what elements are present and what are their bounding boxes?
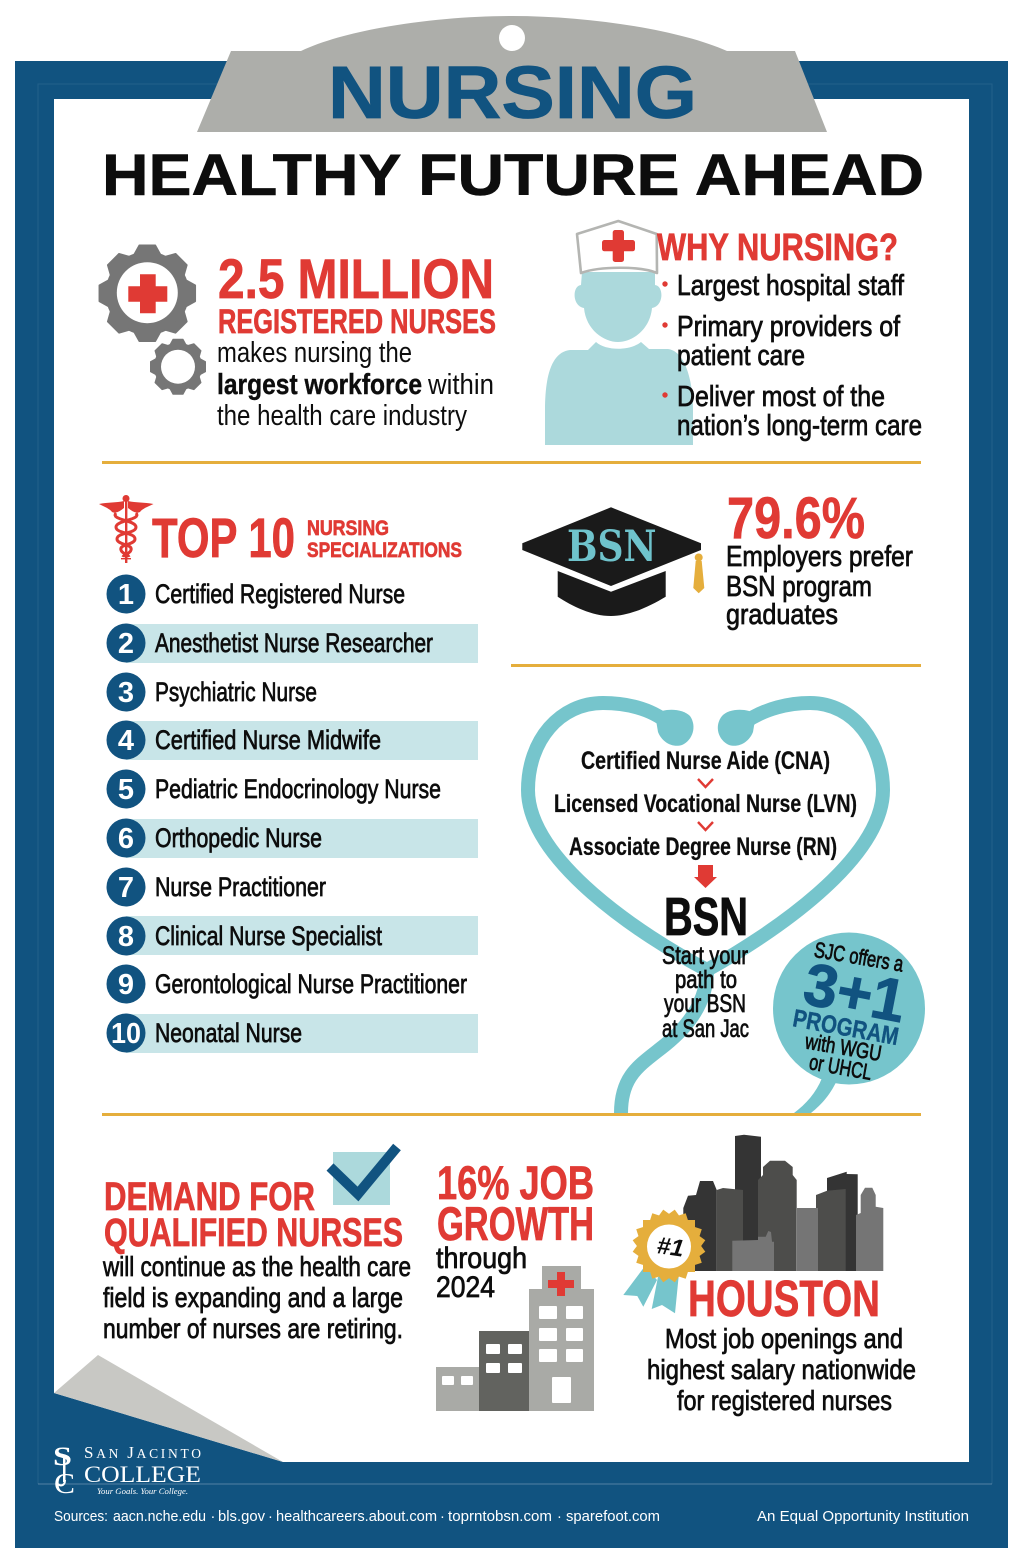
list: specializations: Certified Registered Nurse [155, 579, 405, 609]
equal opportunity note: An Equal Opportunity Institution [757, 1509, 969, 1525]
list: specializations: 3 [118, 677, 134, 709]
badge: 3+1 program [773, 932, 925, 1113]
list: specializations: 1 [118, 579, 134, 611]
sources: bls.gov [218, 1509, 266, 1525]
career path steps: path to [675, 966, 737, 994]
sources: · [557, 1509, 562, 1525]
houston text: HOUSTON [688, 1270, 880, 1327]
career path steps: your BSN [664, 990, 746, 1018]
list: specializations: Gerontological Nurse Practitioner [155, 969, 467, 999]
houston text: Most job openings and [665, 1323, 903, 1354]
stat: 2.5 million registered nurses: makes nursing the [217, 337, 412, 369]
demand for qualified nurses: will continue as the health care [102, 1251, 411, 1282]
icon: nurse [545, 221, 693, 445]
demand for qualified nurses: DEMAND FOR [104, 1175, 315, 1219]
sources: toprntobsn.com [448, 1509, 552, 1525]
list: specializations: 9 [118, 969, 134, 1001]
badge: 3+1 program: with WGU [803, 1028, 884, 1066]
icon: number one ribbon [623, 1210, 705, 1313]
list: specializations [106, 574, 478, 1053]
career path steps: BSN [664, 887, 748, 947]
list: specializations: 8 [118, 921, 134, 953]
list: specializations: 4 [118, 725, 134, 757]
stat: 16 percent job growth: 16% JOB [437, 1156, 594, 1209]
why nursing list: Primary providers of [677, 311, 901, 343]
logo: san jacinto college: Your Goals. Your College. [97, 1486, 188, 1496]
houston text: highest salary nationwide [647, 1354, 916, 1385]
why nursing list: Deliver most of the [677, 381, 885, 413]
stat: 2.5 million registered nurses: REGISTERED NURSES [218, 303, 496, 341]
stat: 16 percent job growth: 2024 [436, 1271, 495, 1304]
list: specializations: 10 [111, 1018, 141, 1050]
icon: houston skyline [683, 1135, 883, 1271]
badge: 3+1 program: or UHCL [807, 1049, 874, 1085]
why nursing heading: WHY NURSING? [657, 227, 898, 269]
sources: sparefoot.com [566, 1509, 660, 1525]
demand for qualified nurses: number of nurses are retiring. [103, 1313, 403, 1344]
icon: graduation cap: BSN [567, 522, 656, 572]
logo: san jacinto college: COLLEGE [84, 1462, 201, 1487]
heading: top 10 nursing specializations: TOP 10 [152, 506, 295, 569]
why nursing list [662, 270, 922, 442]
stat: 79.6 percent: graduates [726, 599, 838, 631]
sources: Sources: [54, 1509, 108, 1525]
icon: graduation cap [522, 507, 704, 616]
sources: · [210, 1509, 215, 1525]
page curl [54, 1355, 283, 1462]
icon: number one ribbon: #1 [655, 1232, 686, 1263]
sources: aacn.nche.edu [113, 1509, 206, 1525]
stat: 2.5 million registered nurses: the health care industry [217, 400, 467, 432]
list: specializations: 5 [118, 774, 134, 806]
stat: 79.6 percent: BSN program [726, 571, 872, 603]
icon: checkmark [330, 1147, 397, 1205]
badge: 3+1 program: SJC offers a [812, 937, 906, 977]
subtitle: HEALTHY FUTURE AHEAD [102, 143, 924, 208]
list: specializations: Clinical Nurse Specialist [155, 921, 382, 951]
heading: top 10 nursing specializations: SPECIALIZATIONS [307, 539, 462, 562]
list: specializations: Psychiatric Nurse [155, 677, 317, 707]
heading: top 10 nursing specializations [152, 506, 462, 569]
why nursing list: nation’s long-term care [677, 410, 922, 442]
icon: caduceus [99, 495, 154, 563]
stat: 2.5 million registered nurses: largest workforce [217, 369, 422, 401]
logo: san jacinto college [53, 1442, 201, 1500]
stat: 79.6 percent: Employers prefer [726, 541, 913, 573]
list: specializations: Pediatric Endocrinology Nurse [155, 774, 441, 804]
houston text: for registered nurses [677, 1385, 892, 1416]
logo: san jacinto college: SAN JACINTO [84, 1443, 201, 1462]
why nursing list: patient care [677, 340, 805, 372]
stat: 2.5 million registered nurses [217, 247, 496, 432]
list: specializations: Nurse Practitioner [155, 872, 326, 902]
career path steps: at San Jac [662, 1015, 749, 1043]
stat: 2.5 million registered nurses: 2.5 MILLION [218, 247, 494, 310]
list: specializations: Orthopedic Nurse [155, 823, 322, 853]
icon: gears [99, 245, 206, 394]
clipboard clip [197, 16, 827, 132]
demand for qualified nurses: QUALIFIED NURSES [104, 1211, 403, 1255]
icon: hospital [436, 1266, 594, 1411]
stat: 16 percent job growth: through [436, 1242, 527, 1275]
sources: healthcareers.about.com [276, 1509, 437, 1525]
sources: · [440, 1509, 445, 1525]
list: specializations: Anesthetist Nurse Researcher [155, 628, 433, 658]
icon: stethoscope heart [528, 703, 883, 1113]
list: specializations: 2 [118, 628, 134, 660]
career path steps: Certified Nurse Aide (CNA) [581, 747, 830, 775]
logo: san jacinto college: S [53, 1442, 72, 1471]
demand for qualified nurses: field is expanding and a large [103, 1282, 403, 1313]
list: specializations: Certified Nurse Midwife [155, 725, 381, 755]
list: specializations: 6 [118, 823, 134, 855]
sources [54, 1509, 660, 1525]
career path steps: Licensed Vocational Nurse (LVN) [554, 790, 857, 818]
houston text [647, 1270, 916, 1416]
logo: san jacinto college: C [54, 1469, 75, 1500]
career path steps: Associate Degree Nurse (RN) [569, 833, 837, 861]
demand for qualified nurses [102, 1175, 411, 1344]
stat: 79.6 percent: 79.6% [727, 486, 865, 551]
stat: 79.6 percent [726, 486, 913, 631]
badge: 3+1 program: PROGRAM [791, 1004, 901, 1051]
list: specializations: Neonatal Nurse [155, 1018, 302, 1048]
why nursing list: Largest hospital staff [677, 270, 905, 302]
title: nursing: NURSING [328, 51, 697, 134]
stat: 16 percent job growth: GROWTH [437, 1197, 594, 1250]
badge: 3+1 program: 3+1 [799, 950, 911, 1035]
career path steps: Start your [662, 942, 748, 970]
sources: · [268, 1509, 273, 1525]
stat: 2.5 million registered nurses: within [427, 369, 494, 401]
career path steps [554, 747, 857, 1043]
heading: top 10 nursing specializations: NURSING [307, 517, 389, 540]
list: specializations: 7 [118, 872, 134, 904]
stat: 16 percent job growth [436, 1156, 594, 1304]
